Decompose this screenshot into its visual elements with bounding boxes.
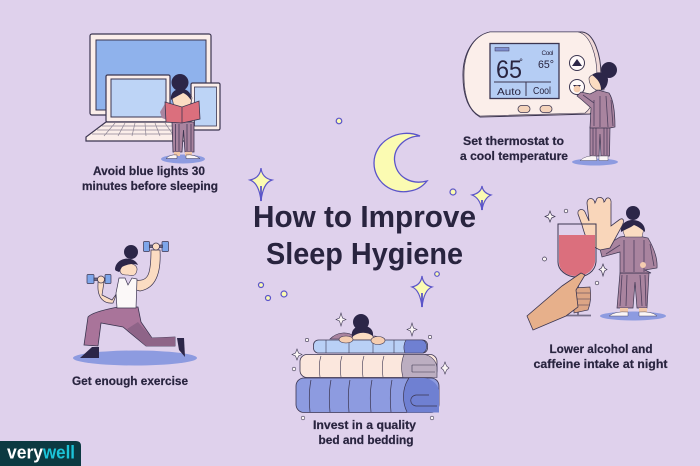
label: alcohol bbox=[534, 344, 668, 371]
icon: desktop monitor bbox=[90, 34, 211, 115]
top blanket bbox=[314, 336, 428, 353]
label: alcohol: caffeine intake at night bbox=[534, 359, 668, 371]
figure: person at thermostat bbox=[572, 62, 618, 166]
label: avoid blue lights bbox=[82, 166, 218, 193]
label: avoid blue lights: minutes before sleeping bbox=[82, 181, 218, 193]
thermostat screen: Cool bbox=[533, 86, 551, 97]
title bbox=[253, 199, 476, 271]
thermostat screen: ° bbox=[519, 57, 523, 67]
figure: person exercising bbox=[80, 245, 185, 358]
bottom blanket bbox=[296, 378, 439, 412]
icon: hand holding glass bbox=[527, 273, 591, 330]
icon: lower dumbbell bbox=[87, 274, 111, 284]
label: exercise: Get enough exercise bbox=[72, 376, 188, 388]
label: alcohol: Lower alcohol and bbox=[550, 344, 652, 356]
thermostat screen: Cool bbox=[542, 50, 554, 57]
icon: upper dumbbell bbox=[144, 242, 168, 252]
icon: crescent moon bbox=[374, 133, 427, 192]
scene: bedding bbox=[292, 313, 449, 447]
sparkles bbox=[292, 313, 449, 420]
scene: alcohol and caffeine bbox=[527, 197, 668, 371]
thermostat screen bbox=[490, 44, 559, 98]
title: How to Improve bbox=[253, 199, 476, 234]
label: avoid blue lights: Avoid blue lights 30 bbox=[93, 166, 205, 178]
logo: verywell: well bbox=[42, 442, 75, 462]
label: thermostat bbox=[460, 136, 568, 163]
logo: verywell bbox=[0, 441, 81, 466]
scene: exercise bbox=[72, 242, 197, 388]
logo: verywell: very bbox=[7, 442, 43, 462]
scene: avoid blue lights bbox=[82, 34, 220, 193]
middle blanket bbox=[300, 354, 437, 378]
title: Sleep Hygiene bbox=[266, 236, 463, 271]
figure: person raising hand bbox=[600, 206, 666, 320]
icon: raised hand bbox=[578, 197, 623, 250]
label: bedding bbox=[313, 420, 417, 447]
label: thermostat: a cool temperature bbox=[460, 151, 568, 163]
thermostat screen: 65 bbox=[496, 56, 522, 84]
label: bedding: Invest in a quality bbox=[313, 420, 417, 432]
sparkles bbox=[542, 209, 607, 285]
icon: tablet bbox=[191, 83, 220, 130]
icon: thermostat body bbox=[463, 32, 601, 117]
figure: person reading bbox=[160, 74, 205, 164]
icon: laptop bbox=[86, 75, 186, 141]
scene: thermostat bbox=[460, 32, 618, 166]
thermostat screen: Auto bbox=[497, 87, 522, 98]
decorative stars and dots bbox=[250, 118, 491, 307]
thermostat buttons bbox=[518, 56, 584, 112]
thermostat screen: 65° bbox=[538, 59, 554, 71]
icon: wine glass bbox=[558, 224, 596, 316]
label: bedding: bed and bedding bbox=[318, 435, 414, 447]
label: thermostat: Set thermostat to bbox=[463, 136, 564, 148]
figure: person behind bedding bbox=[330, 314, 385, 340]
figure shadow bbox=[73, 350, 197, 366]
